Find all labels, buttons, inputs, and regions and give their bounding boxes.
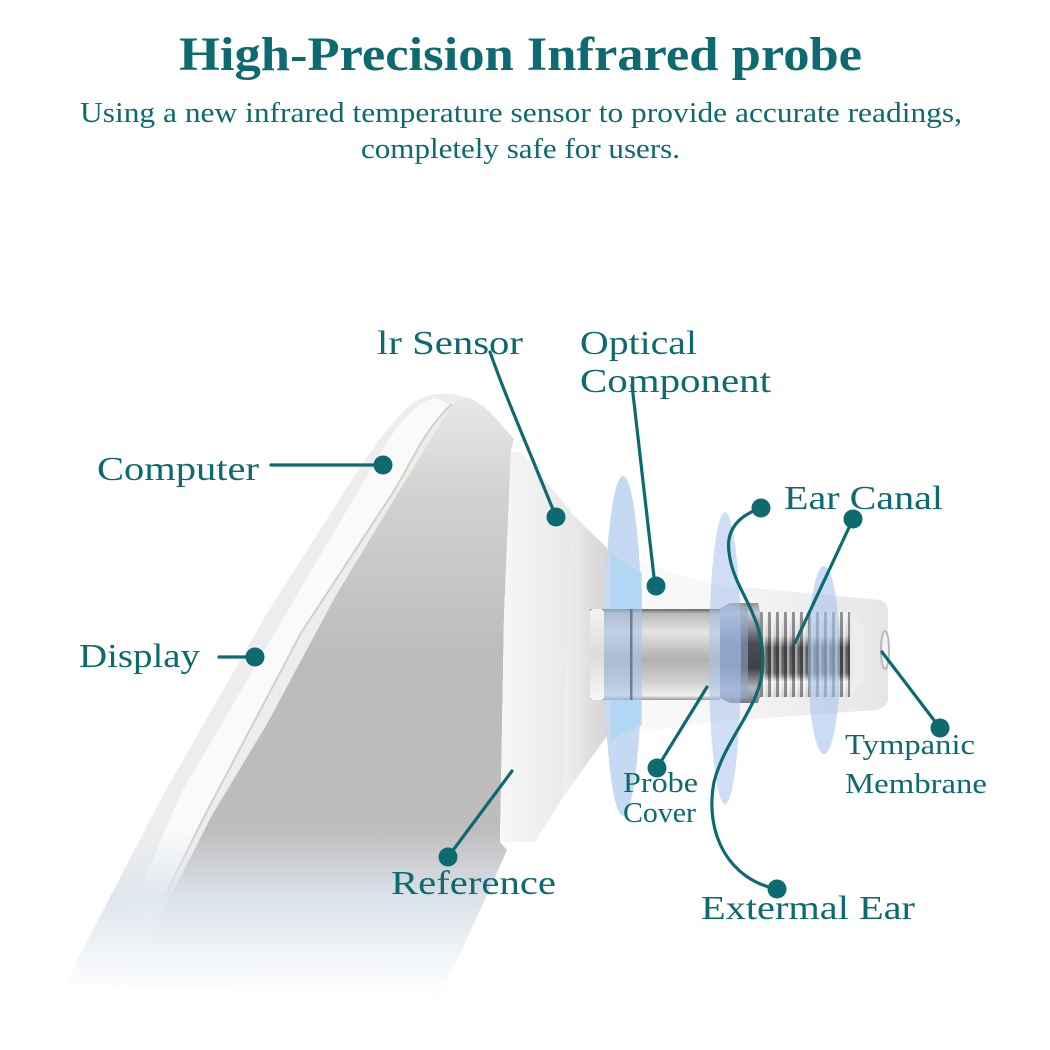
tympanic ring [881, 631, 889, 669]
label: tympanic membrane [845, 730, 987, 800]
threaded shaft [758, 612, 864, 697]
outer shell [124, 394, 468, 870]
marker dots [246, 456, 950, 898]
neck block [500, 451, 570, 842]
gray face [174, 398, 514, 992]
blue ellipse 3 [808, 566, 840, 754]
probe cover [607, 552, 888, 738]
blue ellipse 2 [709, 512, 741, 804]
white rim strip [154, 399, 448, 858]
label: Ir sensor: lr Sensor [377, 325, 524, 362]
label: computer: Computer [97, 451, 260, 488]
fade at bottom of device [66, 842, 506, 995]
leader lines [219, 352, 940, 889]
label: ear canal: Ear Canal [784, 480, 943, 517]
label: reference: Reference [391, 865, 556, 902]
blue ellipse 1 [604, 476, 642, 816]
device body [50, 394, 520, 1000]
title: High-Precision Infrared probe [179, 28, 862, 81]
label: tympanic membrane: Membrane [845, 769, 987, 800]
metal barrel [590, 609, 720, 700]
neck cone [563, 510, 607, 797]
label: external ear: Extermal Ear [701, 890, 916, 927]
label: optical component [580, 325, 772, 400]
label: probe cover: Probe [623, 768, 698, 799]
label: probe cover [623, 768, 698, 829]
blue beam [611, 553, 642, 741]
label: optical component: Optical [580, 325, 697, 362]
label: probe cover: Cover [623, 798, 697, 829]
label: display: Display [79, 638, 200, 675]
hex nut [720, 603, 760, 703]
subtitle: completely safe for users. [361, 134, 680, 165]
label: tympanic membrane: Tympanic [845, 730, 975, 761]
label: optical component: Component [580, 363, 772, 400]
subtitle: Using a new infrared temperature sensor to provide accurate readings, [80, 98, 962, 129]
subtitle [80, 98, 962, 165]
rim seam [166, 403, 452, 892]
